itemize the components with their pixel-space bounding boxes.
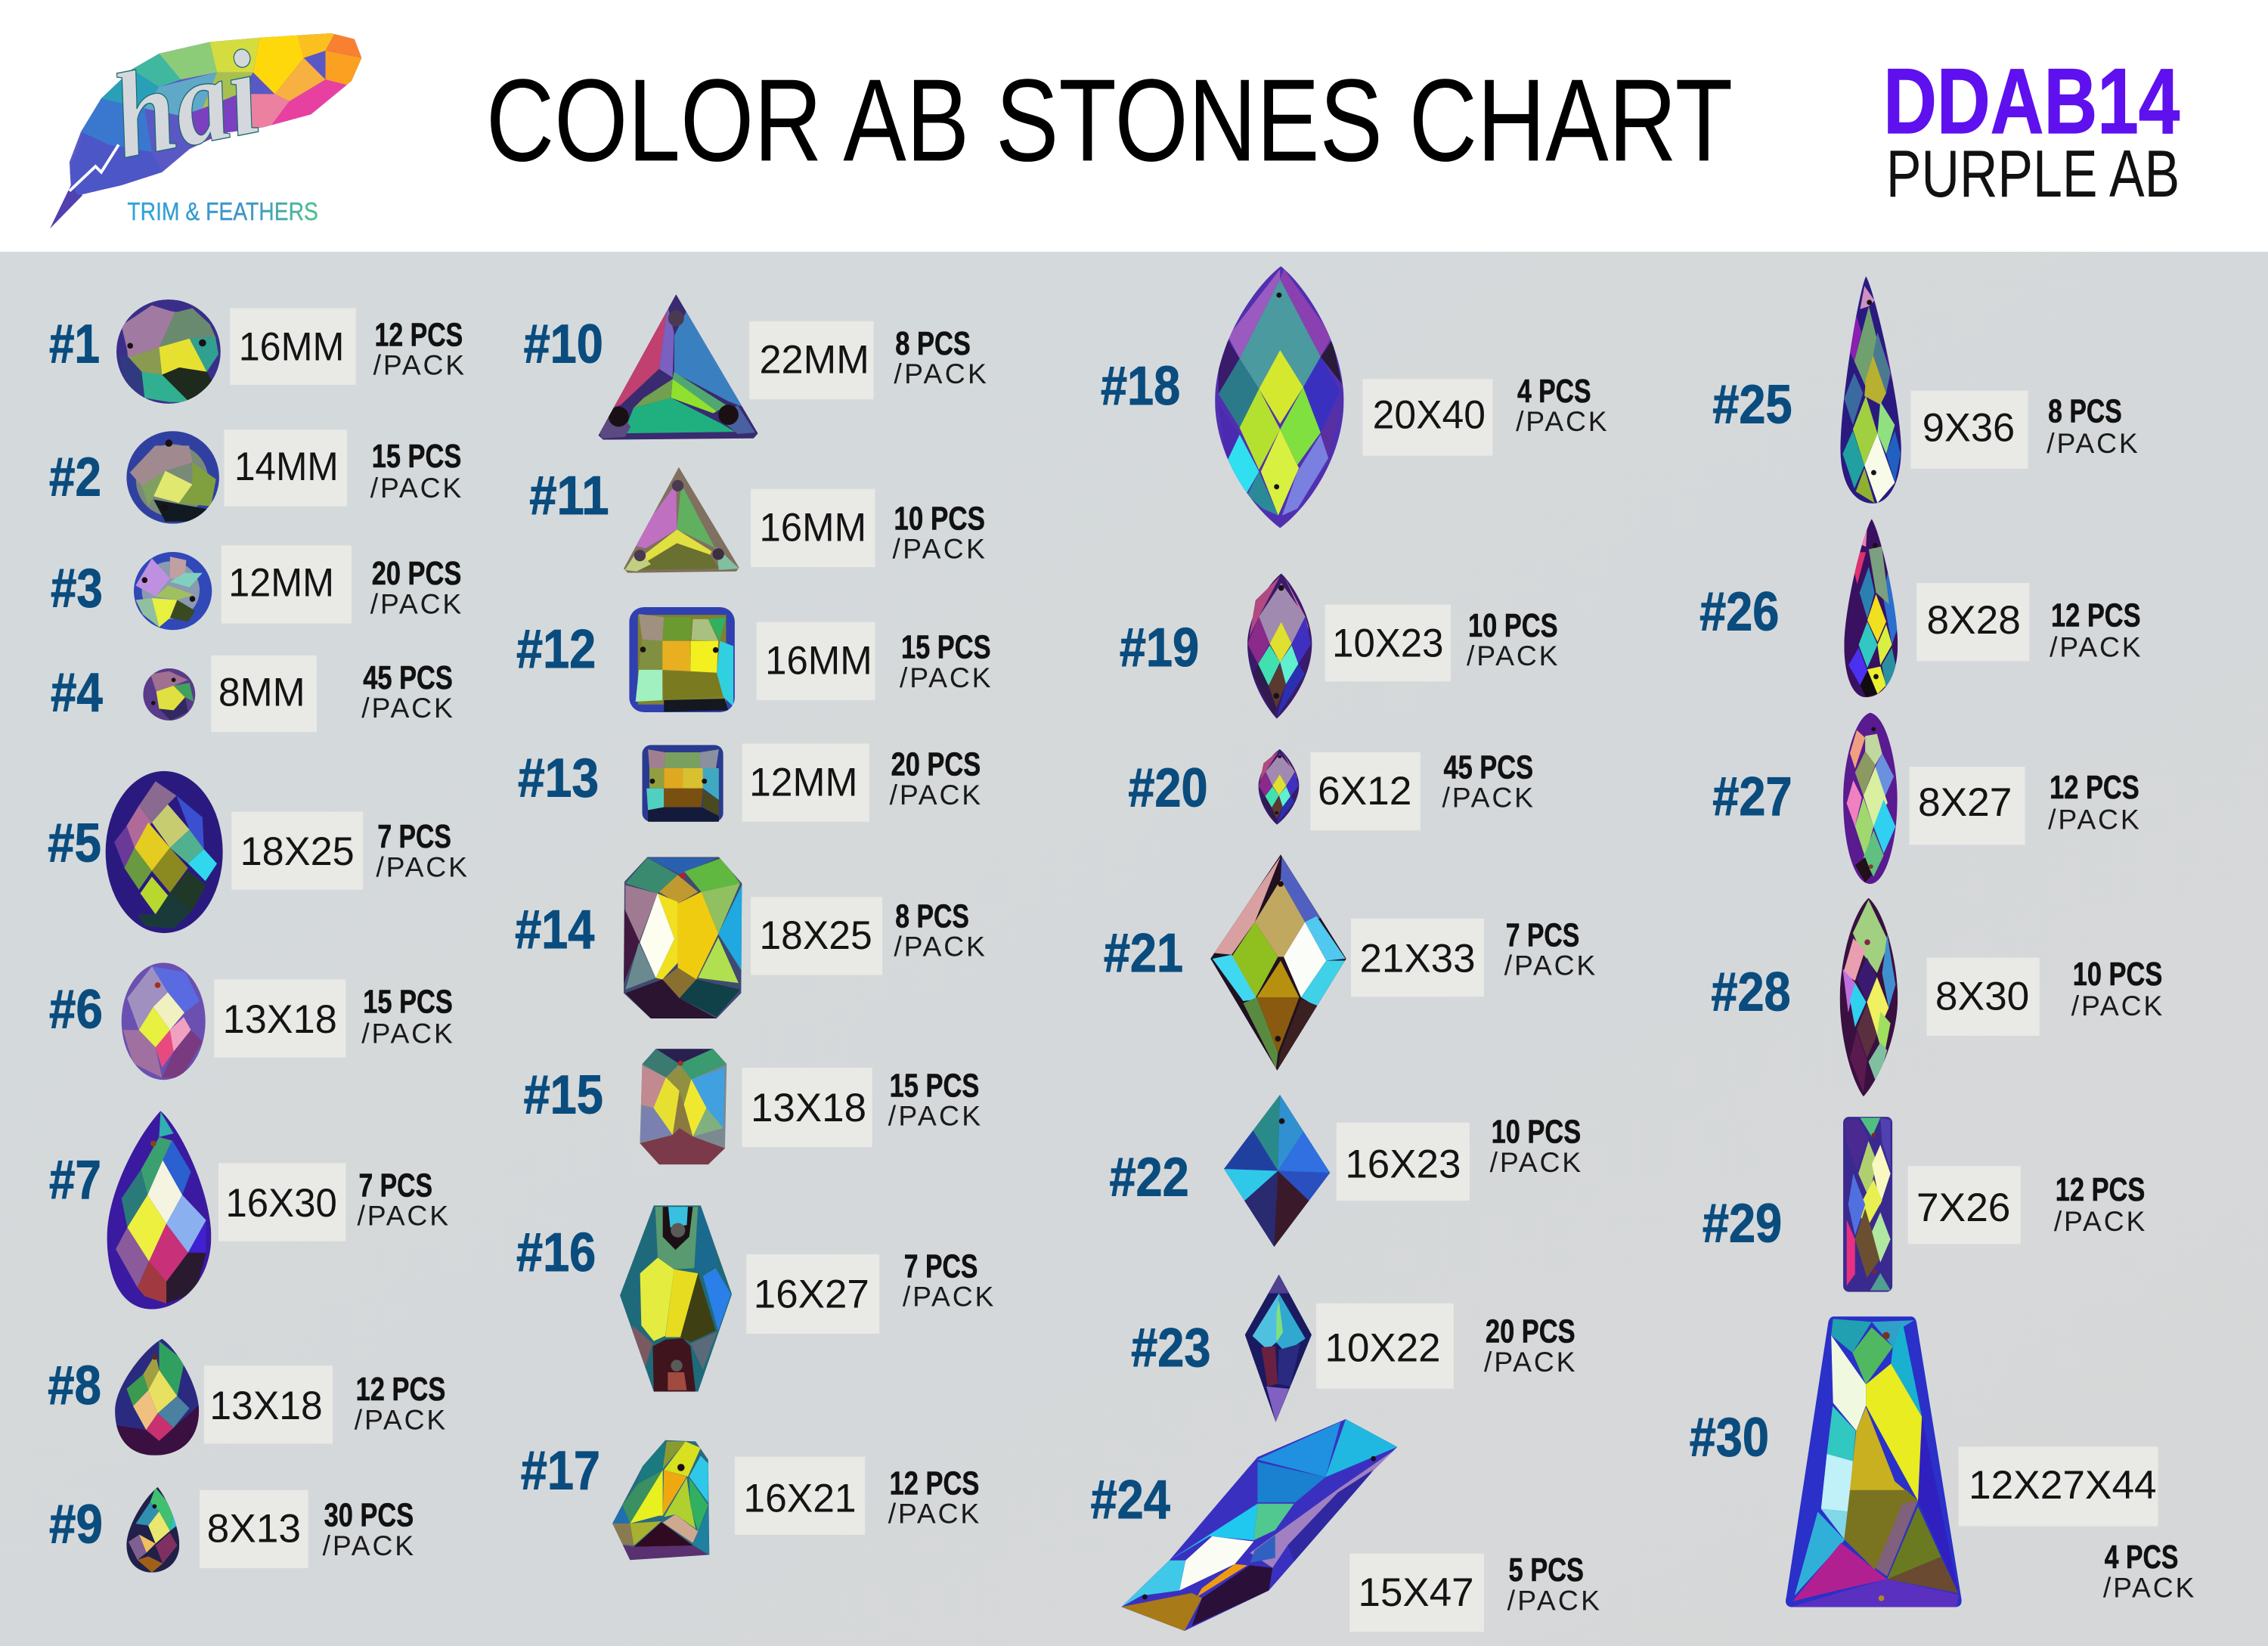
pack quantity: 10 PCS [1492,1114,1581,1151]
size label: 8X13 [207,1507,301,1551]
size label: 16X23 [1345,1142,1461,1186]
pack quantity [358,1167,448,1232]
pack quantity: /PACK [2103,1571,2195,1603]
pack quantity: /PACK [900,662,991,693]
size label: 21X33 [1359,937,1476,981]
pack quantity: 12 PCS [2051,597,2141,634]
size label [742,743,869,822]
pack quantity: 30 PCS [324,1497,414,1534]
pack quantity [900,629,991,693]
pack quantity [373,316,464,381]
size label [211,656,317,732]
size label [222,545,352,624]
number #12: #12 [516,618,596,680]
pack quantity [894,897,985,962]
number #23: #23 [1131,1317,1210,1378]
number #6: #6 [49,978,103,1040]
number #17: #17 [521,1440,600,1502]
pack quantity: 15 PCS [901,629,991,666]
pack quantity [2046,393,2138,459]
number #19: #19 [1120,617,1199,678]
size label: 8X27 [1918,780,2012,825]
pack quantity: 10 PCS [1468,607,1558,644]
pack quantity [2050,597,2141,663]
number #24: #24 [1091,1469,1170,1530]
pack quantity: /PACK [888,1498,979,1530]
number #21: #21 [1104,922,1183,984]
item #19 [1120,573,1558,719]
stone 11: triangle [622,466,741,575]
pack quantity: 8 PCS [895,325,971,362]
item #13 [518,743,981,822]
pack quantity: 12 PCS [356,1371,445,1408]
item #15 [524,1047,981,1166]
pack quantity [1442,749,1533,814]
pack quantity: /PACK [361,692,453,724]
pack quantity [2071,956,2162,1021]
logo feather [50,29,369,228]
pack quantity: 15 PCS [890,1067,979,1104]
number #7: #7 [49,1149,101,1210]
pack quantity: /PACK [892,533,985,565]
pack quantity [361,983,453,1049]
size label: 16MM [239,324,344,369]
stone 25: long teardrop [1839,275,1902,505]
pack quantity: 20 PCS [1486,1313,1576,1350]
pack quantity [903,1248,994,1313]
item #11 [529,465,985,575]
size label [1926,958,2040,1036]
pack quantity: /PACK [2050,631,2141,663]
pack quantity: 15 PCS [363,983,453,1020]
size label: 6X12 [1318,769,1411,814]
item #29 [1703,1115,2145,1294]
pack quantity: /PACK [361,1018,453,1049]
pack quantity [370,438,461,504]
pack quantity: 15 PCS [372,438,461,475]
number #26: #26 [1699,581,1779,642]
pack quantity [2103,1539,2195,1603]
stone 14: emerald cut [622,855,745,1020]
number #4: #4 [51,662,103,723]
number #20: #20 [1128,758,1208,819]
number #14: #14 [515,899,595,960]
stone 3: round [133,551,212,631]
number #5: #5 [48,812,101,873]
size label [1910,767,2025,845]
stone 16: faceted hexagon [619,1204,733,1393]
pack quantity: 12 PCS [2050,769,2139,806]
pack quantity [888,1067,981,1132]
pack quantity [355,1371,445,1435]
stone 8: teardrop [114,1338,201,1457]
stone 21: kite [1209,854,1348,1072]
pack quantity [1516,373,1607,437]
pack quantity: /PACK [894,931,985,962]
pack quantity: /PACK [1467,640,1558,671]
number #1: #1 [49,313,100,374]
item #25 [1712,275,2138,505]
pack quantity: /PACK [890,779,981,811]
item #22 [1109,1093,1581,1248]
size label [751,897,882,975]
size label [746,1254,879,1334]
logo tagline: TRIM & FEATHERS [127,198,318,226]
stone 7: teardrop [106,1110,212,1310]
item #9 [49,1486,414,1574]
size label [749,321,874,399]
pack quantity: /PACK [1490,1146,1581,1178]
pack quantity: 7 PCS [904,1248,978,1285]
pack quantity [2054,1171,2145,1237]
size label [1910,391,2028,469]
number #9: #9 [49,1494,103,1555]
pack quantity: 12 PCS [890,1465,979,1502]
stone 4: round [142,667,197,722]
pack quantity: 10 PCS [2073,956,2162,993]
number #3: #3 [51,558,103,619]
pack quantity: /PACK [2071,990,2162,1021]
size label: 12MM [749,760,858,804]
item #6 [49,962,453,1080]
size label: 8MM [218,671,305,715]
pack quantity: 4 PCS [1517,373,1591,410]
pack quantity [1484,1313,1576,1378]
size label [1959,1446,2158,1527]
size label [735,1457,865,1535]
pack quantity: 20 PCS [372,555,461,592]
stone 26: long teardrop [1843,518,1899,699]
item #26 [1699,518,2141,699]
logo: Hai Trim & Feathers [50,24,369,228]
stone 9: teardrop [125,1486,181,1574]
item #18 [1101,265,1607,529]
size label [1351,919,1484,997]
stone 10: triangle [596,293,761,442]
pack quantity: /PACK [323,1530,414,1561]
stone 1: round [116,298,222,405]
size label: 20X40 [1373,392,1486,437]
item #21 [1104,854,1595,1072]
header band [0,0,2268,252]
size label: 12X27X44 [1969,1463,2157,1508]
size label [1916,583,2029,661]
pack quantity: /PACK [2046,427,2138,459]
pack quantity [2048,769,2139,835]
size label [1908,1166,2021,1244]
item #14 [515,855,985,1020]
size label [1362,379,1492,456]
size label: 22MM [759,338,869,383]
size label: 10X22 [1325,1325,1441,1370]
size label [214,979,345,1058]
item #8 [48,1338,445,1457]
item #3 [51,545,461,631]
stone 18: navette [1213,265,1345,529]
pack quantity: 20 PCS [891,746,981,783]
number #11: #11 [529,465,609,526]
size label [1325,605,1451,681]
size label: 12MM [228,560,334,605]
stone 15: emerald cut [638,1047,729,1166]
pack quantity [361,659,453,724]
stone 23: elongated kite [1244,1273,1313,1424]
stone 22: rhombus [1222,1093,1332,1248]
pack quantity: /PACK [376,851,467,882]
number #29: #29 [1703,1193,1782,1254]
pack quantity: 45 PCS [1443,749,1533,786]
stone 28: navette [1839,897,1899,1098]
number #2: #2 [49,446,101,507]
number #18: #18 [1101,355,1180,417]
stone 29: baguette [1842,1115,1893,1294]
size label: 18X25 [759,913,872,958]
pack quantity: 12 PCS [2056,1171,2145,1208]
size label [1349,1554,1484,1632]
pack quantity: 7 PCS [358,1167,432,1204]
stone 2: round [125,429,220,525]
pack quantity: 10 PCS [894,500,985,537]
colour name: PURPLE AB [1886,136,2180,211]
number #10: #10 [524,313,603,374]
pack quantity [1467,607,1558,671]
pack quantity: /PACK [370,472,461,504]
item #12 [516,607,991,712]
number #16: #16 [516,1222,596,1283]
pack quantity [376,818,467,882]
pack quantity: 7 PCS [377,818,451,855]
item #28 [1711,897,2162,1098]
stone 30: trapezoid [1783,1315,1964,1609]
size label [230,308,356,385]
size label: 16X27 [754,1272,869,1317]
number #8: #8 [48,1355,101,1416]
pack quantity: /PACK [2054,1205,2145,1237]
stone 24: diagonal baguette [1120,1418,1400,1633]
number #22: #22 [1109,1146,1189,1207]
pack quantity: 4 PCS [2105,1539,2178,1576]
pack quantity [323,1497,414,1561]
pack quantity: /PACK [358,1200,448,1232]
size label: 7X26 [1916,1186,2010,1230]
item #2 [49,429,461,525]
item #30 [1690,1315,2195,1609]
size label: 13X18 [223,997,337,1042]
stone 6: oval [120,962,207,1080]
size label: 9X36 [1923,406,2015,451]
stone 27: pointed oval [1842,711,1899,885]
pack quantity: /PACK [1507,1585,1600,1617]
product code: DDAB14 [1883,49,2180,153]
size label: 15X47 [1359,1570,1474,1615]
pack quantity: 8 PCS [895,897,969,935]
number #30: #30 [1690,1407,1769,1468]
size label: 16X21 [743,1476,857,1520]
pack quantity [888,1465,979,1530]
pack quantity: /PACK [888,1100,981,1132]
size label: 13X18 [209,1384,323,1428]
pack quantity: /PACK [373,349,464,381]
size label [742,1068,872,1147]
item #7 [49,1110,448,1310]
size label: 18X25 [240,829,355,874]
item #20 [1128,749,1533,830]
pack quantity: 12 PCS [375,316,463,353]
pack quantity: 7 PCS [1506,916,1579,953]
stone 20: navette [1259,749,1299,825]
pack quantity [1507,1551,1600,1617]
size label [218,1163,345,1241]
size label [231,811,363,890]
size label: 16MM [765,639,872,684]
title: COLOR AB STONES CHART [486,54,1733,185]
stone 13: square [642,745,723,822]
pack quantity: /PACK [370,587,461,619]
pack quantity: /PACK [903,1281,994,1313]
pack quantity: /PACK [894,358,987,389]
pack quantity: /PACK [1484,1346,1576,1378]
size label [204,1365,333,1443]
size label [1316,1303,1454,1389]
number #27: #27 [1712,766,1792,827]
pack quantity [1504,916,1595,981]
size label [225,429,347,507]
size label: 10X23 [1332,622,1443,666]
stone 17: faceted shield [610,1438,711,1562]
stone 12: square [629,607,735,712]
number #28: #28 [1711,961,1791,1022]
stone 5: oval [104,770,225,935]
pack quantity: /PACK [2048,803,2139,835]
item #5 [48,770,467,935]
item #16 [516,1204,994,1393]
item #4 [51,656,453,732]
size label: 8X30 [1935,975,2029,1019]
item #27 [1712,711,2139,885]
pack quantity [894,325,987,389]
logo wordmark: hai [102,24,270,184]
stone 19: navette [1247,573,1312,719]
size label: 13X18 [751,1086,866,1130]
pack quantity [890,746,981,811]
size label [1337,1123,1470,1201]
pack quantity: 45 PCS [363,659,453,696]
size label: 16X30 [225,1181,337,1226]
pack quantity [1490,1114,1581,1178]
size label [200,1490,308,1568]
item #24 [1091,1418,1600,1633]
size label [751,489,875,567]
size label: 8X28 [1926,598,2021,643]
number #25: #25 [1712,374,1792,436]
pack quantity: /PACK [1442,782,1533,814]
pack quantity: /PACK [355,1403,445,1435]
item #1 [49,298,464,405]
size label [757,622,875,700]
pack quantity [370,555,461,619]
item #10 [524,293,987,442]
item #17 [521,1438,979,1562]
pack quantity: /PACK [1504,950,1595,981]
size label: 14MM [234,445,339,489]
pack quantity [892,500,985,565]
item #23 [1131,1273,1576,1424]
pack quantity: 5 PCS [1509,1551,1584,1589]
size label [1310,752,1421,830]
number #15: #15 [524,1064,603,1125]
pack quantity: 8 PCS [2048,393,2122,430]
pack quantity: /PACK [1516,405,1607,437]
size label: 16MM [759,506,866,550]
number #13: #13 [518,747,599,808]
